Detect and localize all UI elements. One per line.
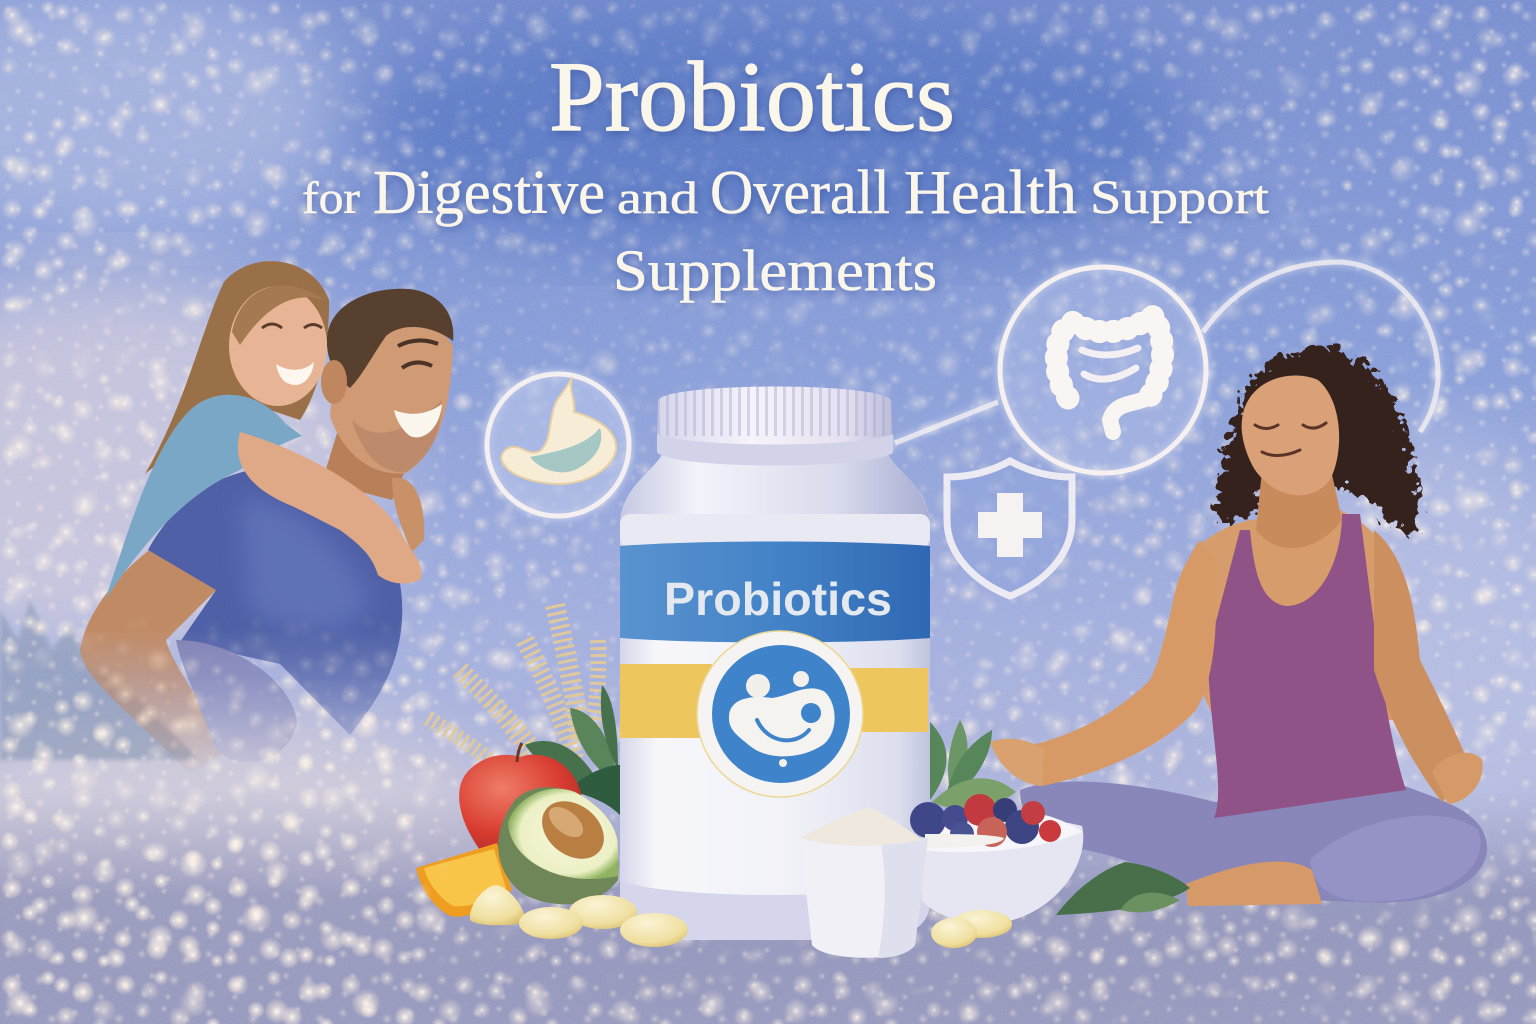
- left arm: [1032, 540, 1216, 786]
- subtitle line: Health: [904, 159, 1077, 227]
- connector loops and line: [895, 262, 1438, 443]
- bottle body: [620, 455, 930, 940]
- tank top: [1208, 514, 1406, 818]
- daughter's arm and hand: [238, 432, 422, 583]
- wheat sprigs: [428, 605, 599, 775]
- apple: [459, 743, 583, 850]
- green leaves left: [525, 685, 620, 815]
- daughter's eyes: [262, 324, 322, 328]
- illustration: father and daughter: [80, 261, 453, 775]
- daughter's fringe: [232, 285, 328, 345]
- berries: [910, 794, 1061, 847]
- daughter's legs: [176, 640, 297, 762]
- neck: [1256, 465, 1342, 548]
- right arm: [1374, 530, 1472, 802]
- father's right arm: [392, 478, 424, 552]
- father's eye and brow: [398, 340, 438, 368]
- bottle base shade: [620, 880, 930, 940]
- father's shirt: [148, 468, 402, 735]
- yellow band left: [620, 664, 712, 738]
- yellow band right: [850, 668, 928, 732]
- icon: intestines: [1000, 267, 1206, 473]
- icon: shield with cross: [947, 461, 1072, 596]
- label logo: [697, 631, 863, 797]
- daughter's shirt: [105, 395, 302, 600]
- subtitle line: [302, 159, 1270, 227]
- daughter's smile: [276, 362, 314, 385]
- green leaves right: [930, 720, 1016, 809]
- crossed legs: [1020, 782, 1487, 903]
- daughter's hair: [145, 261, 329, 474]
- eyes and mouth: [1255, 423, 1326, 456]
- father's face: [330, 315, 453, 473]
- torso: [1170, 510, 1410, 720]
- subtitle line: Digestive: [373, 159, 605, 227]
- right hand: [1432, 753, 1483, 804]
- foot: [1186, 862, 1322, 906]
- neck ring: [620, 514, 930, 548]
- father's neck: [326, 432, 404, 500]
- subtitle line: Overall: [710, 159, 890, 227]
- father's ear: [321, 360, 347, 404]
- father's hair: [327, 289, 453, 388]
- bottle shoulder: [620, 455, 930, 528]
- subtitle line: and: [617, 172, 698, 223]
- father's stubble: [352, 400, 442, 472]
- avocado half: [498, 787, 618, 904]
- label wordmark: Probiotics: [664, 573, 892, 625]
- father's left arm: [80, 548, 228, 775]
- bowl of berries: [910, 794, 1083, 923]
- bottle: [620, 386, 930, 940]
- blue label band: [620, 542, 930, 642]
- illustration: meditating woman: [990, 340, 1487, 906]
- icon: stomach: [487, 374, 629, 516]
- cap: [657, 386, 893, 466]
- hair: [1211, 340, 1414, 528]
- main title: Probiotics: [549, 41, 955, 152]
- shirt highlight: [240, 500, 370, 631]
- daughter's face: [229, 286, 327, 406]
- title block: [302, 41, 1270, 303]
- capsules: [470, 885, 1012, 948]
- foreground sparkle over the left: [2, 621, 444, 1024]
- left hand: [990, 739, 1045, 786]
- subtitle line: for: [302, 172, 360, 223]
- face: [1242, 376, 1339, 495]
- orange slice: [416, 843, 512, 917]
- herb sprig: [1056, 862, 1190, 915]
- scoop of powder: [800, 807, 1004, 958]
- father's smile: [394, 404, 442, 437]
- final title line: Supplements: [613, 238, 937, 303]
- subtitle line: Support: [1090, 171, 1270, 224]
- right knee highlight: [1310, 816, 1481, 902]
